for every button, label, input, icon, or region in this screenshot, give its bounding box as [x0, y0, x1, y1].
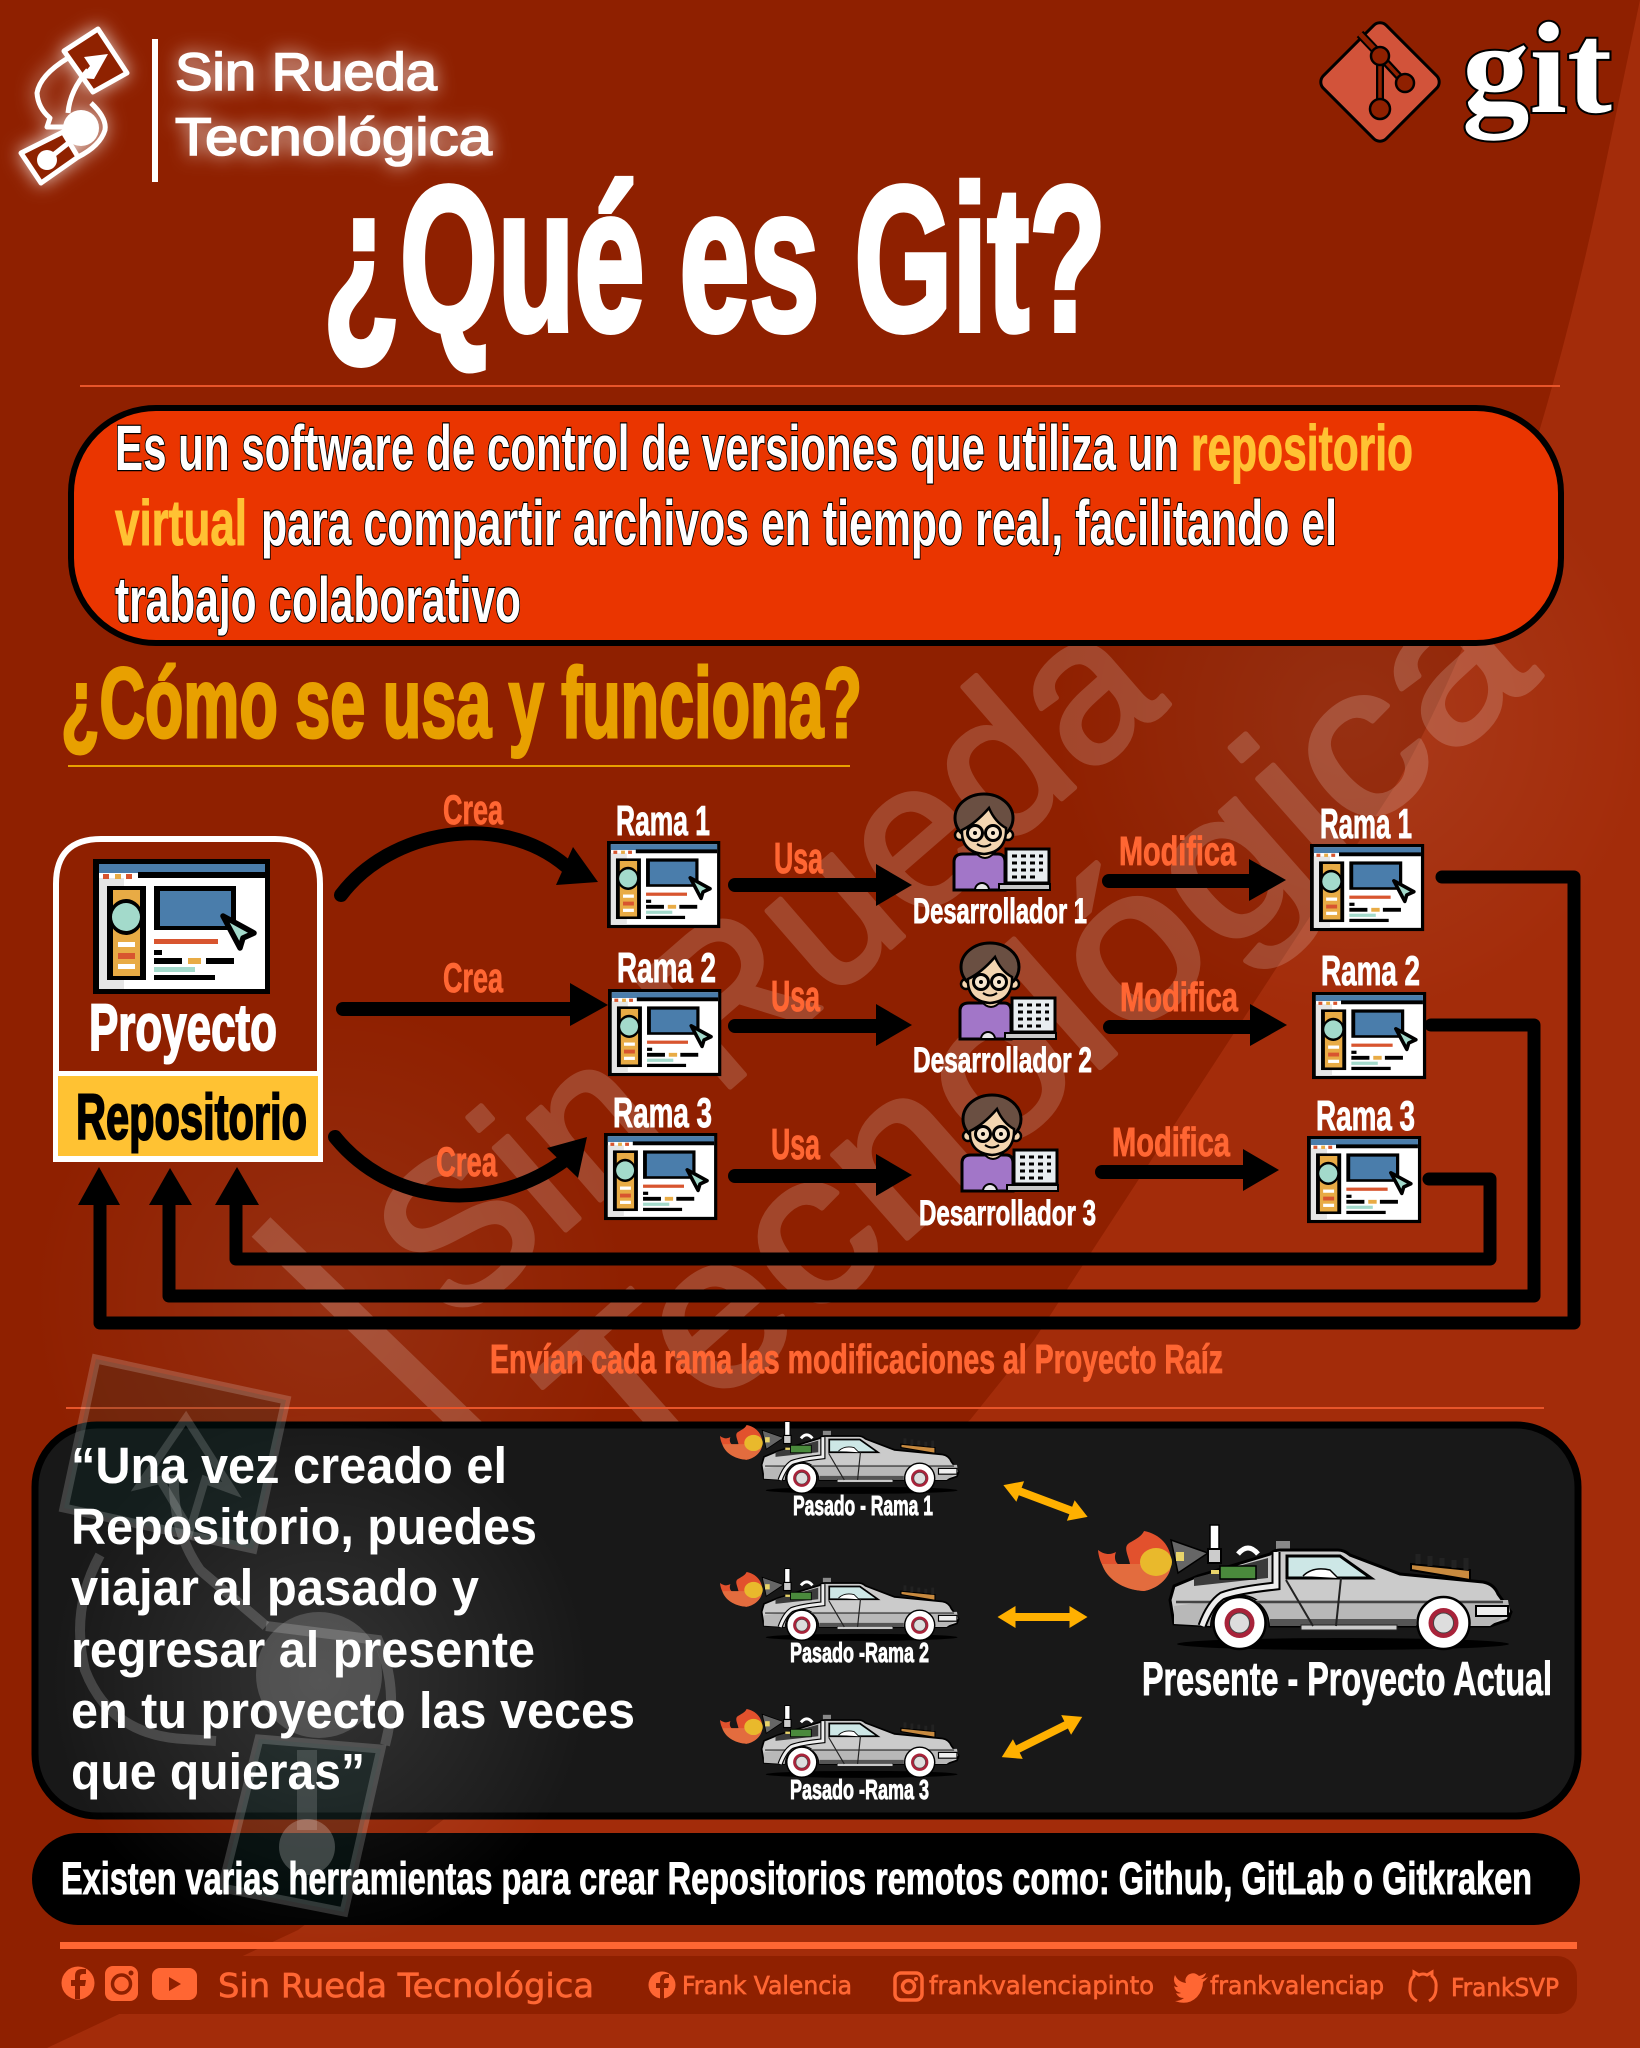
branch 2 left: Rama 2 [617, 944, 716, 991]
label: modifica 3: Modifica [1112, 1119, 1231, 1165]
watermark: text: Sin Rueda [331, 564, 1199, 1361]
brand name: Sin Rueda [175, 43, 438, 102]
developer 1 [913, 794, 1087, 931]
icon: instagram small [895, 1973, 922, 2000]
developer 2: Desarrollador 2 [913, 1041, 1092, 1080]
icon: facebook [62, 1966, 94, 2000]
header divider [152, 39, 158, 182]
label: usa 2: Usa [771, 972, 820, 1021]
panel: definition [71, 408, 1561, 643]
definition text [115, 412, 1413, 636]
branch 1 left [607, 797, 720, 928]
brand handle: Sin Rueda Tecnológica [218, 1966, 594, 2005]
arrow: usa 2 [735, 1004, 912, 1046]
label: pasado rama 2: Pasado -Rama 2 [790, 1637, 929, 1668]
car: pasado 3 [720, 1706, 959, 1778]
panel: time travel [35, 1422, 1578, 1816]
label: modifica 2: Modifica [1120, 974, 1239, 1020]
icon: project window [93, 859, 270, 994]
label: pasado rama 3: Pasado -Rama 3 [790, 1774, 929, 1805]
definition text: virtual [115, 487, 247, 559]
watermark: text [261, 532, 1572, 1606]
handle: frankvalenciap: frankvalenciap [1210, 1971, 1384, 2000]
label: Repositorio: Repositorio [76, 1081, 307, 1153]
branch 1 left: Rama 1 [616, 797, 710, 844]
definition text: repositorio [1191, 412, 1413, 484]
developer 2 [913, 943, 1092, 1080]
icon: youtube [152, 1968, 197, 2000]
arrow: usa 1 [735, 864, 912, 906]
car: presente [1098, 1525, 1511, 1650]
quote text: viajar al pasado y [71, 1559, 480, 1616]
icon: instagram [105, 1966, 138, 2001]
handle: FrankSVP: FrankSVP [1451, 1973, 1559, 2002]
developer 1: Desarrollador 1 [913, 892, 1087, 931]
handle: frankvalenciapinto: frankvalenciapinto [929, 1971, 1154, 2000]
developer 3 [919, 1095, 1096, 1233]
branch 3 right [1307, 1092, 1421, 1223]
arrow: usa 3 [735, 1154, 912, 1196]
label: usa 1: Usa [774, 834, 823, 883]
caption: return: Envían cada rama las modificaciones al Proyecto Raíz [490, 1336, 1223, 1382]
arrow: pasado 2 to presente [998, 1606, 1088, 1628]
return arrowheads [78, 1167, 259, 1205]
return lines to repository [100, 877, 1574, 1323]
footer rule [60, 1942, 1577, 1949]
label: usa 3: Usa [771, 1120, 820, 1169]
branch 1 right: Rama 1 [1320, 800, 1412, 847]
label: pasado rama 1: Pasado - Rama 1 [793, 1490, 933, 1521]
git wordmark: git [1462, 0, 1612, 141]
quote text: que quieras” [71, 1743, 365, 1800]
brand name: Tecnológica [175, 108, 493, 167]
branch 3 left [604, 1089, 717, 1220]
label: crea 3: Crea [436, 1138, 497, 1185]
branch 3 right: Rama 3 [1316, 1092, 1415, 1139]
handle: Frank Valencia: Frank Valencia [682, 1971, 852, 2000]
quote text: Repositorio, puedes [71, 1498, 537, 1555]
title rule [80, 385, 1560, 387]
branch 2 right [1312, 947, 1426, 1079]
branch 2 right: Rama 2 [1321, 947, 1420, 994]
heading rule [68, 765, 850, 767]
title: ¿Qué es Git? [323, 144, 1106, 374]
panel: project repository [56, 839, 320, 1159]
arrow: crea 3 [335, 1137, 587, 1195]
arrow: crea 1 [341, 833, 598, 895]
branch 2 left [608, 944, 721, 1076]
quote text [71, 1437, 635, 1800]
arrow: modifica 2 [1110, 1004, 1287, 1046]
definition text: trabajo colaborativo [115, 564, 521, 636]
arrow: pasado 1 to presente [1000, 1475, 1091, 1527]
quote text: regresar al presente [71, 1621, 535, 1678]
arrow: modifica 1 [1109, 859, 1286, 901]
branch 3 left: Rama 3 [613, 1089, 712, 1136]
developer 3: Desarrollador 3 [919, 1194, 1096, 1233]
git logo icon [1317, 19, 1443, 145]
car: pasado 1 [720, 1422, 959, 1494]
label: crea 1: Crea [443, 786, 503, 833]
label: Proyecto: Proyecto [89, 990, 277, 1064]
quote text: “Una vez creado el [71, 1437, 507, 1494]
watermark: text: Tecnológica [498, 532, 1572, 1522]
label: modifica 1: Modifica [1119, 828, 1237, 874]
arrow: pasado 3 to presente [997, 1707, 1087, 1767]
branch 1 right [1310, 800, 1424, 931]
watermark: logo [50, 1359, 590, 1950]
brand name [175, 43, 493, 167]
footer bar [60, 1956, 1577, 2014]
icon: twitter [1174, 1973, 1208, 2003]
arrow: modifica 3 [1102, 1149, 1279, 1191]
car: pasado 2 [720, 1569, 959, 1641]
header logo [21, 29, 127, 183]
heading: how it works: ¿Cómo se usa y funciona? [61, 647, 862, 758]
panel: tools [32, 1833, 1580, 1925]
icon: github [1410, 1972, 1436, 2001]
arrow: crea 2 [343, 983, 608, 1026]
section rule [66, 1407, 1544, 1409]
quote text: en tu proyecto las veces [71, 1682, 635, 1739]
icon: facebook small [648, 1972, 676, 1999]
label: crea 2: Crea [443, 954, 503, 1001]
